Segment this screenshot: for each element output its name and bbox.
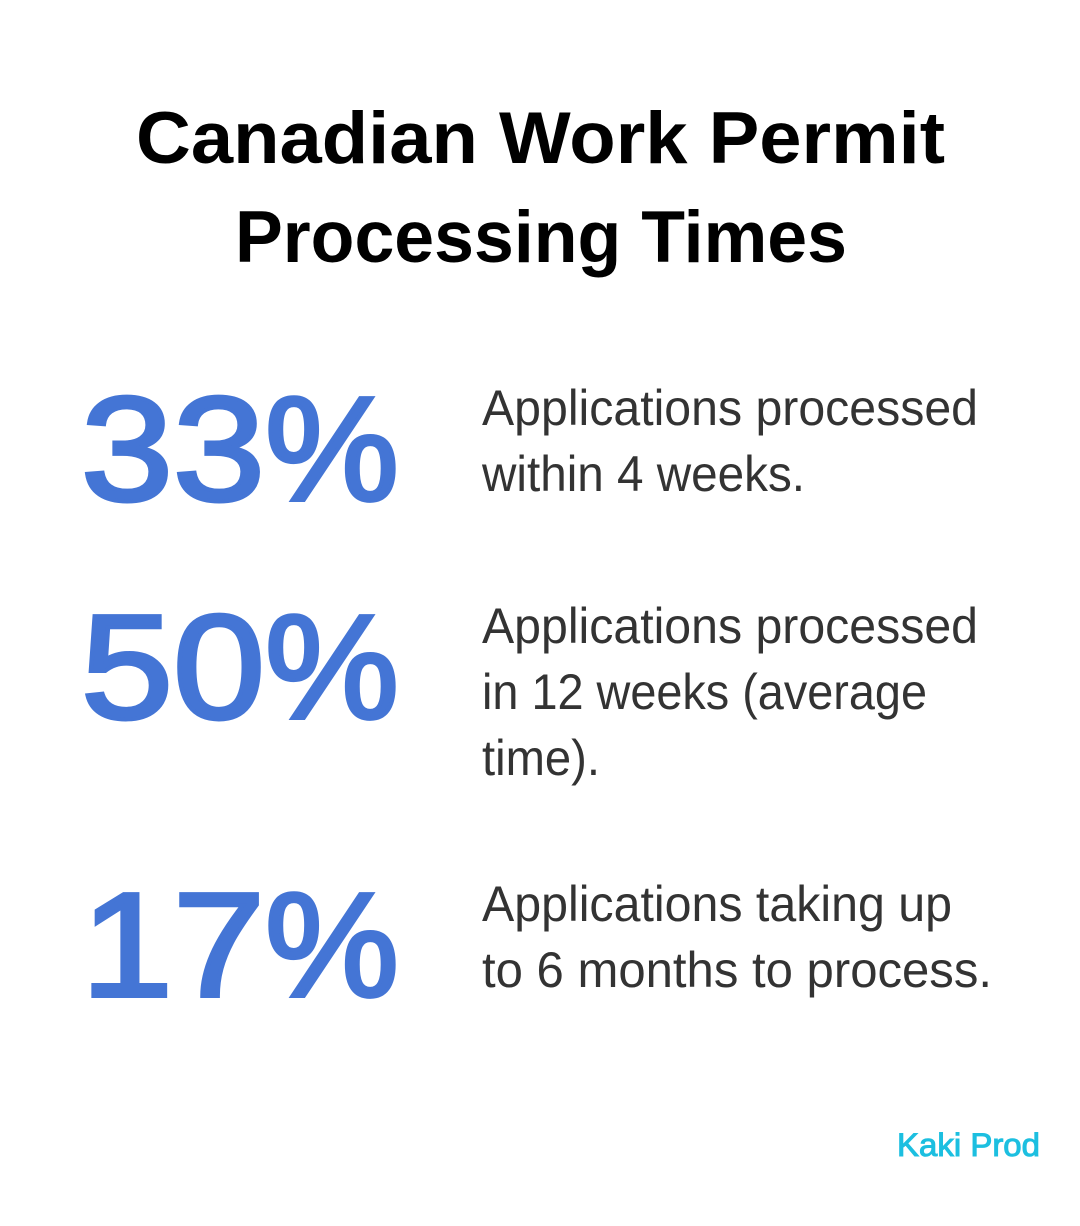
description: up to 6 months [482, 876, 992, 998]
title [136, 98, 945, 278]
logo: Kaki Prod: Kaki Prod [897, 1127, 1040, 1163]
number: 17%: % [265, 863, 399, 1028]
stat: 17 percent [81, 863, 992, 1028]
number: 50%: % [265, 585, 399, 750]
description: up to 6 months: Applications taking up [482, 876, 952, 932]
description: within 4 weeks [481, 380, 978, 502]
stat: 33 percent [81, 367, 978, 532]
number: 33%: 33 [81, 367, 265, 532]
number: 50%: 50 [81, 585, 265, 750]
stat: 50 percent [81, 585, 978, 786]
title: Processing Times [235, 197, 847, 278]
description: within 4 weeks: within 4 weeks. [481, 446, 805, 502]
description: up to 6 months: to 6 months to process. [482, 942, 992, 998]
description: 12 weeks average: Applications processed [482, 598, 978, 654]
description: 12 weeks average: in 12 weeks (average [482, 664, 927, 720]
number: 17%: 17 [81, 863, 265, 1028]
title: Canadian Work Permit [136, 98, 945, 179]
description: 12 weeks average [482, 598, 978, 786]
number: 33%: % [265, 367, 399, 532]
description: 12 weeks average: time). [482, 730, 600, 786]
description: within 4 weeks: Applications processed [482, 380, 978, 436]
